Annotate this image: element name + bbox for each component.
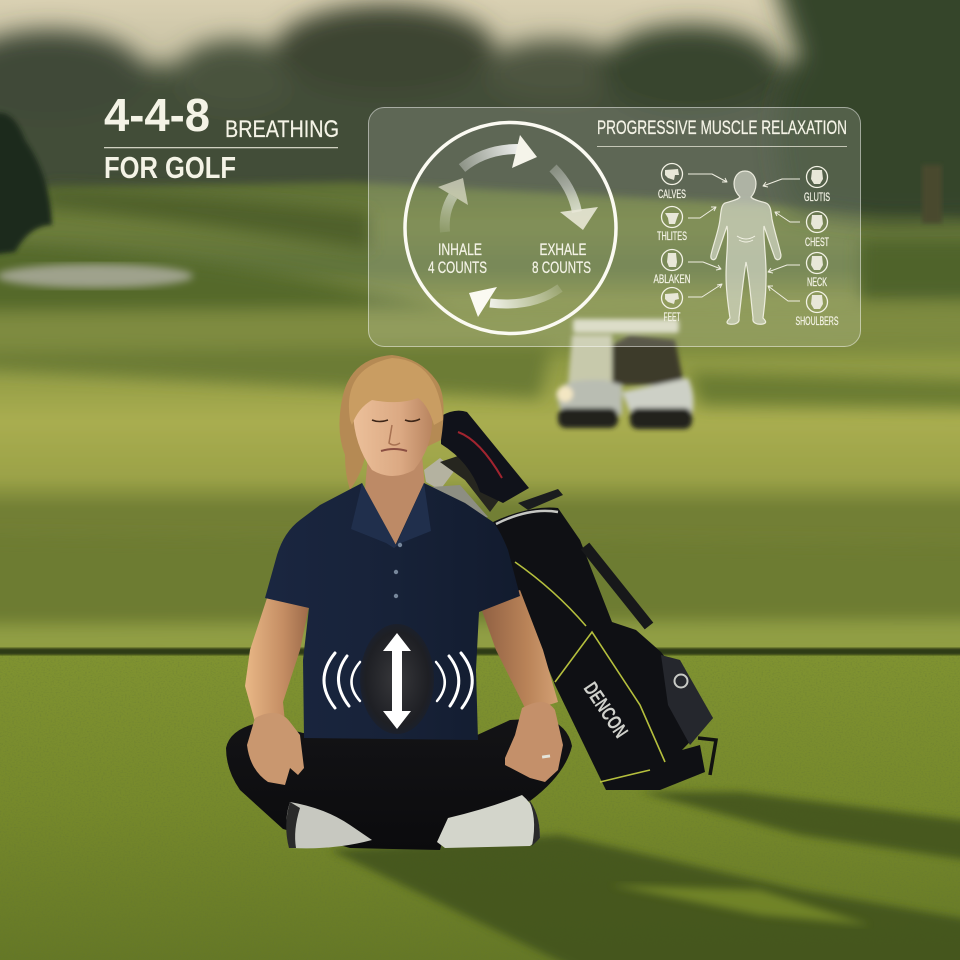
title rule [104,147,338,148]
sand bunker [0,264,193,288]
title: 4-4-8: 4-4-8 [104,89,210,141]
iron heads [431,485,488,520]
golf cart [556,319,693,429]
cart body left [556,380,622,415]
muscle group: shoulders: SHOULBERS [796,314,838,328]
muscle group: calves [658,164,686,201]
fairway light and shadow bands [0,188,960,645]
muscle group: neck [806,252,828,289]
collar [351,483,431,548]
body connector arrows [688,174,800,301]
closed eyes [372,419,420,422]
arrow: right [553,168,598,230]
cart windshield [568,335,612,385]
title: breathing: BREATHING [225,116,339,143]
muscle group: glutes: GLUTIS [804,190,830,204]
head cover stripe [458,432,502,478]
distant tree line [0,5,960,225]
cart roof [573,319,679,333]
club shafts [440,452,505,512]
bag body [493,508,713,790]
sunlit strip in shadow [610,885,870,925]
muscle group: thighs [657,206,687,243]
label: inhale counts: 4 COUNTS [428,258,487,277]
heading rule [597,146,847,147]
arrow: left [438,178,468,232]
fairway edge dark line [0,648,960,655]
muscle group: chest: CHEST [805,235,829,249]
right shoe [437,795,540,848]
wedding ring [542,754,550,759]
bag stand loop [698,738,716,775]
title block [104,89,339,185]
turf texture [0,652,960,960]
left breath waves [324,653,360,708]
diaphragm breathing overlay [324,624,472,734]
bag logo badge [674,674,688,688]
muscle group: shoulders [796,292,838,328]
label: exhale: EXHALE [540,240,586,259]
neck [364,455,426,548]
label: inhale: INHALE [438,240,482,259]
outer ring [405,122,616,334]
cart body right [622,378,693,415]
title: for golf: FOR GOLF [104,150,236,185]
abdomen mark [737,236,755,242]
arrow: top [462,135,537,168]
muscle group: neck: NECK [807,275,827,289]
right hand [505,702,563,782]
face [353,384,432,476]
silhouette [711,171,781,324]
bag rim [496,511,558,524]
turf foreground [0,652,960,960]
right breath waves [436,653,472,708]
hair fringe [349,358,443,425]
left foreground tree [0,113,52,255]
cart headlight [557,386,573,402]
hair back [339,355,444,490]
panel background [368,108,860,346]
heading: progressive muscle relaxation: PROGRESSIVE MUSCLE RELAXATION [597,118,847,139]
muscle group: abdomen: ABLAKEN [654,272,690,286]
glass info panel [368,108,860,346]
sky [0,0,960,120]
left arm [245,595,309,722]
polo shirt [265,483,520,740]
right shoe heel [527,797,540,846]
nose shadow [389,425,400,445]
human body figure [711,171,781,324]
cart occupants [612,335,684,385]
muscle group: chest [805,212,829,249]
pants [226,718,572,850]
muscle group: feet: FEET [664,310,681,324]
left shoe heel [286,802,300,848]
label: exhale counts: 8 COUNTS [532,258,591,277]
head cover [441,411,529,503]
muscle group: abdomen [654,250,690,286]
golf bag [424,411,716,790]
bag brand: DENCON [579,678,632,742]
muscle group: glutes [804,166,830,204]
right tree mass [770,0,960,222]
bag shoulder strap [585,546,649,626]
cast shadows on turf [330,792,960,960]
fairway base [0,182,960,660]
cart wheels [558,408,692,429]
mouth [381,449,407,451]
belly ellipse [360,624,434,734]
arrow: bottom [469,287,560,317]
muscle group: feet [662,288,682,324]
bag lime piping [515,562,665,782]
bag handle [518,489,563,510]
placket buttons [394,543,402,598]
bag pocket [661,655,713,745]
club heads [424,458,455,490]
right tree trunk [922,165,942,223]
left shoe [286,802,372,848]
breathing cycle diagram [405,122,616,334]
vertical double arrow [383,633,411,729]
woman meditating [226,355,572,850]
muscle group: calves: CALVES [658,187,686,201]
left hand [247,713,304,785]
muscle group: thighs: THLITES [657,229,687,243]
right arm [480,590,558,712]
